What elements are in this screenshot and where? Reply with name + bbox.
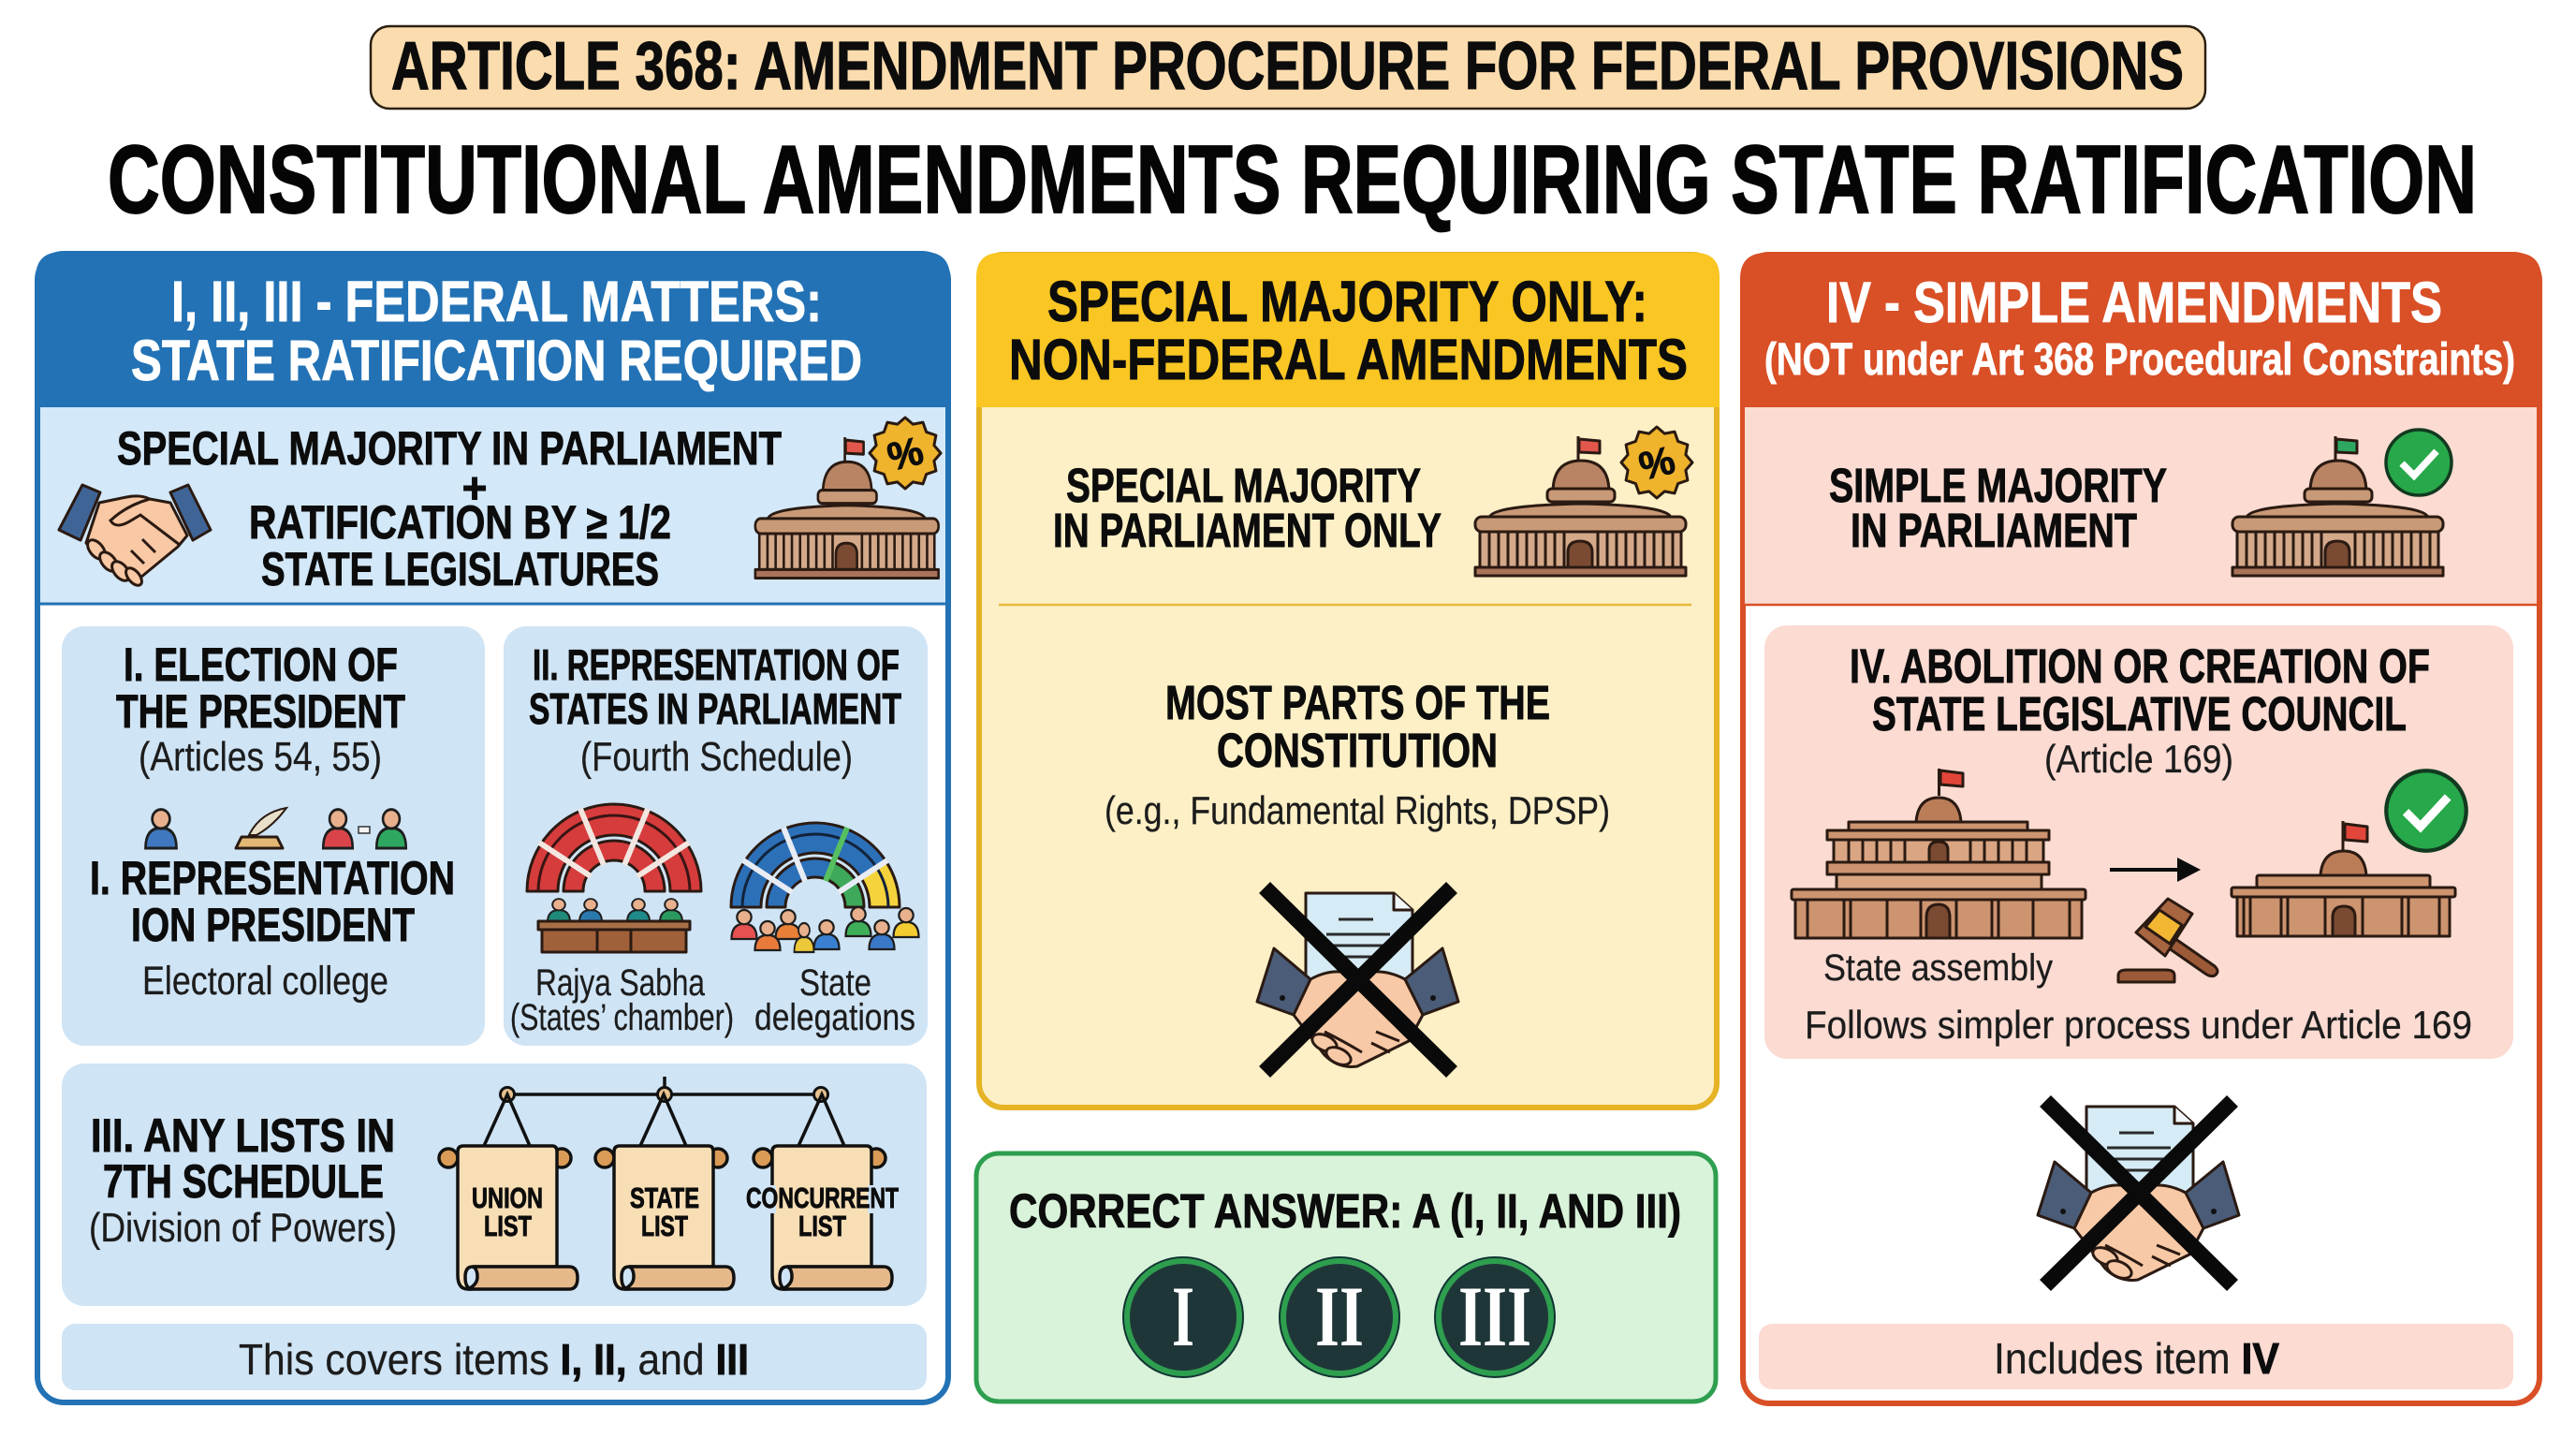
chart: state delegations multicolour hemicycle [731, 823, 919, 952]
badge: III: III [1458, 1269, 1531, 1364]
header: simple amendments [1740, 253, 2541, 407]
text: most parts of the constitution: CONSTITUTION [1217, 724, 1498, 777]
icon: handshake [59, 485, 211, 588]
text: most parts of the constitution: MOST PARTS OF THE [1165, 676, 1550, 729]
icon: concurrent list scroll: CONCURRENT [746, 1181, 899, 1214]
text: most parts of the constitution [1105, 676, 1610, 832]
header: federal matters: STATE RATIFICATION REQUIRED [131, 329, 862, 392]
icon: union list scroll [439, 1094, 578, 1289]
card: representation of states: State [799, 962, 871, 1004]
card: representation of states: Rajya Sabha [535, 962, 706, 1004]
callout: correct answer: CORRECT ANSWER: A (I, II, AND III) [1009, 1184, 1681, 1238]
procedure band [40, 407, 945, 604]
panel: federal matters [36, 252, 950, 1402]
panel: simple amendments [1740, 253, 2541, 1403]
icon: gavel [2118, 899, 2217, 982]
procedure band: SIMPLE MAJORITY [1829, 459, 2167, 512]
card: election of the president: Electoral college [142, 959, 388, 1004]
panel: special majority only [976, 253, 1720, 1108]
icon: crossed-out handshake [2038, 1101, 2239, 1285]
badge: III [1435, 1257, 1555, 1377]
summary strip: includes item [1759, 1324, 2513, 1389]
card: abolition or creation of council: State assembly [1823, 947, 2053, 989]
header: special majority only: NON-FEDERAL AMENDMENTS [1009, 328, 1688, 391]
badge: II: II [1315, 1269, 1364, 1364]
card: seventh schedule lists: (Division of Powers) [89, 1205, 397, 1251]
icon: union list scroll: UNION [472, 1181, 543, 1214]
card: abolition or creation of council: Follows simpler process under Article 169 [1805, 1003, 2472, 1047]
card: representation of states: (States’ chamber) [510, 997, 734, 1038]
header: federal matters [36, 252, 950, 407]
header: simple amendments: IV - SIMPLE AMENDMENTS [1826, 271, 2442, 334]
procedure band: RATIFICATION BY ≥ 1/2 [249, 496, 671, 549]
card: representation of states: II. REPRESENTATION OF [533, 640, 900, 689]
summary strip: includes item: Includes item IV [1994, 1334, 2279, 1383]
card: abolition or creation of council [1764, 625, 2513, 1059]
icon: union list scroll: LIST [484, 1210, 532, 1242]
card: election of the president: THE PRESIDENT [116, 685, 405, 738]
card: representation of states: STATES IN PARLIAMENT [529, 684, 901, 733]
text: special majority in parliament only: IN PARLIAMENT ONLY [1053, 504, 1442, 557]
header: federal matters: I, II, III - FEDERAL MATTERS: [171, 270, 822, 333]
header: special majority only [976, 253, 1720, 407]
card: election of the president: (Articles 54, 55) [139, 734, 382, 780]
text: special majority in parliament only [1053, 459, 1442, 557]
card: seventh schedule lists: III. ANY LISTS IN [91, 1109, 395, 1162]
card: abolition or creation of council: STATE LEGISLATIVE COUNCIL [1872, 687, 2407, 741]
card: abolition or creation of council: (Article 169) [2044, 737, 2233, 781]
icon: concurrent list scroll: LIST [798, 1210, 846, 1242]
icon: crossed-out handshake [1257, 888, 1458, 1072]
icon: state assembly building [1792, 769, 2086, 938]
icon: state list scroll: LIST [641, 1210, 688, 1242]
procedure band: + [462, 463, 487, 512]
badge: II [1280, 1257, 1399, 1377]
procedure band: IN PARLIAMENT [1851, 504, 2137, 557]
card: representation of states: (Fourth Schedule) [580, 734, 853, 780]
icon: parliament with percent badge [755, 418, 941, 578]
card: seventh schedule lists: 7TH SCHEDULE [103, 1155, 384, 1208]
icon: smaller council building with check [2232, 770, 2466, 936]
badge: I: I [1172, 1269, 1194, 1364]
icon: parliament with percent badge: % [883, 428, 928, 479]
header: special majority only: SPECIAL MAJORITY ONLY: [1047, 270, 1647, 333]
icon: parliament with check [2232, 430, 2452, 576]
procedure band [1745, 407, 2537, 605]
icon: concurrent list scroll [746, 1094, 899, 1289]
icon: state list scroll: STATE [630, 1181, 699, 1214]
procedure band: SPECIAL MAJORITY IN PARLIAMENT [117, 422, 782, 475]
chart: Rajya Sabha red hemicycle [527, 804, 701, 952]
card: representation of states: delegations [754, 997, 915, 1038]
text: most parts of the constitution: (e.g., Fundamental Rights, DPSP) [1105, 788, 1610, 832]
icon: parliament with percent badge [1475, 427, 1692, 576]
icon: state list scroll [595, 1094, 734, 1289]
callout: correct answer [976, 1153, 1716, 1401]
card: election of the president [62, 626, 485, 1046]
card: election of the president: ION PRESIDENT [131, 899, 415, 951]
card: representation of states [504, 626, 928, 1046]
summary strip: covers items: This covers items I, II, and III [239, 1335, 749, 1384]
procedure band: STATE LEGISLATURES [261, 543, 659, 595]
icon: voters and ballot [146, 808, 406, 848]
card: seventh schedule lists [62, 1064, 927, 1306]
card: election of the president: I. REPRESENTATION [90, 852, 455, 904]
text: special majority in parliament only: SPECIAL MAJORITY [1066, 459, 1421, 512]
summary strip: covers items [62, 1324, 927, 1390]
icon: parliament with percent badge: % [1634, 437, 1679, 489]
badge: I [1123, 1257, 1243, 1377]
card: election of the president: I. ELECTION OF [124, 638, 398, 691]
arrow [2110, 858, 2201, 882]
icon: balance beam [500, 1077, 827, 1101]
